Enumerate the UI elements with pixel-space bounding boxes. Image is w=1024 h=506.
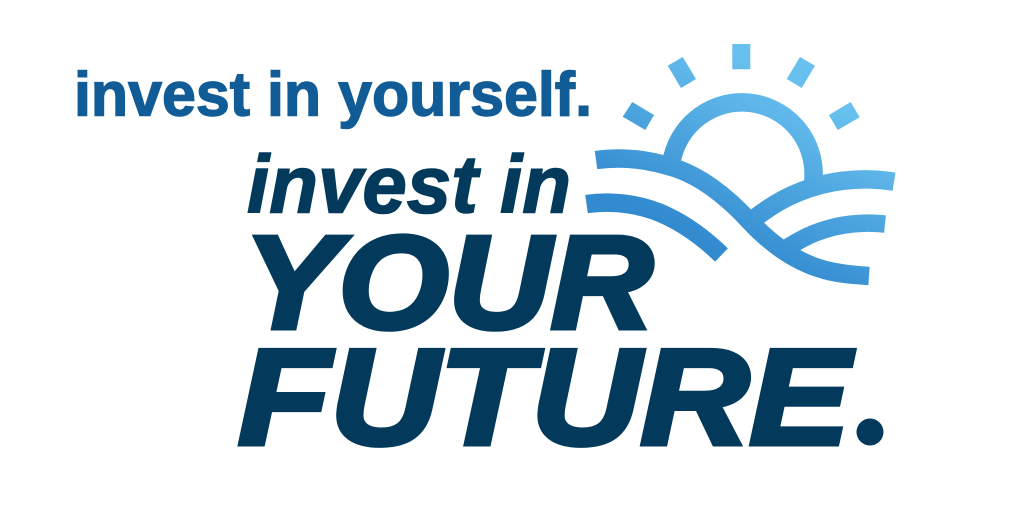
heading: YOUR: YOUR: [244, 209, 653, 356]
heading: invest in: invest in: [247, 140, 571, 230]
icon: sun over rolling hills: [586, 44, 894, 276]
icon: hill lines: [586, 158, 894, 276]
heading: FUTURE.: .: [865, 405, 876, 449]
heading: invest in yourself.: invest in yourself.: [74, 60, 592, 130]
icon: sun rays: [623, 44, 860, 130]
icon: sun arc: [670, 102, 814, 190]
heading: FUTURE.: FUTURE: [238, 321, 855, 473]
